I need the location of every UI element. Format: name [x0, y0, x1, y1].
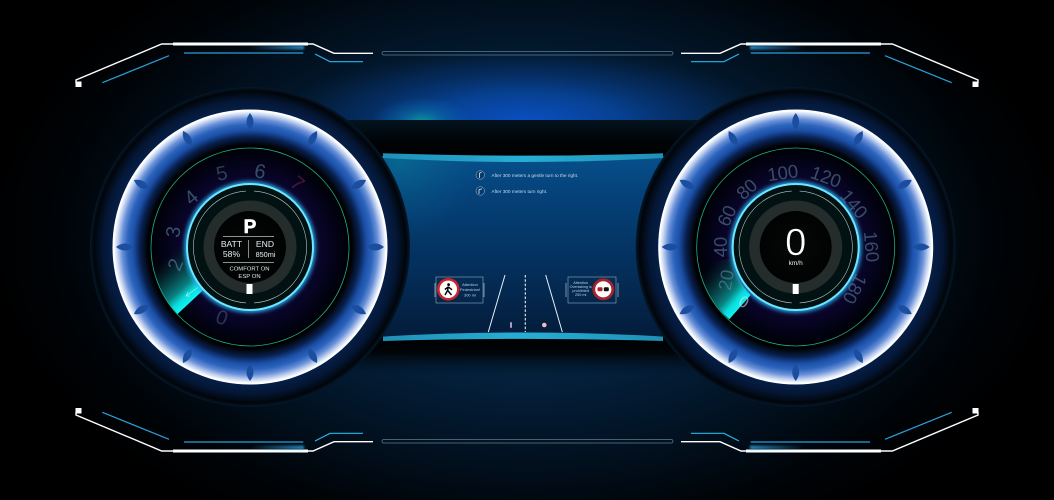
scale ring: [151, 148, 349, 346]
speed scale numbers: 60: [713, 202, 741, 229]
speed scale numbers: 0: [735, 293, 751, 312]
road lane lines: [488, 275, 562, 332]
sign panel: overtaking prohibited: 250 mi: [575, 293, 587, 297]
speed scale numbers: 20: [714, 268, 738, 292]
position marker: [793, 284, 799, 294]
sign panel: pedestrian: Attention: [462, 282, 478, 287]
frame: bottom centre bar: [382, 440, 673, 443]
frame: top centre bar: [382, 52, 673, 55]
sign panel: overtaking prohibited: prohibited: [572, 289, 589, 293]
speed scale numbers: 80: [732, 174, 761, 204]
battery readout: BATT: [221, 239, 243, 249]
icon: road marker person: [510, 322, 512, 328]
position marker: [246, 284, 252, 294]
hub dividers: [223, 237, 274, 263]
top cyan band: [383, 153, 663, 162]
rev scale numbers: 0: [213, 306, 231, 331]
sign panel: overtaking prohibited: Attention: [573, 281, 588, 285]
range readout: END: [256, 239, 274, 249]
speed scale numbers: 120: [808, 162, 844, 192]
icon: pedestrian sign: [438, 279, 458, 299]
frame: bottom right: [681, 408, 978, 451]
navigation instruction 2: After 300 meters turn right.: [492, 189, 547, 194]
needle sweep: [698, 258, 751, 319]
sign panel: pedestrian: 300 mi: [464, 292, 476, 298]
cyan hub ring: [733, 184, 859, 310]
sign panel: overtaking prohibited: Overtaking is: [570, 285, 592, 289]
rev scale numbers: 4: [180, 186, 203, 210]
speed scale numbers: 140: [836, 185, 872, 223]
needle sweep: [151, 247, 203, 314]
gauge bezel ring: [112, 110, 388, 384]
rev scale numbers: 2: [164, 256, 188, 274]
right gauge: [636, 87, 956, 407]
rev scale numbers: 7: [286, 172, 308, 196]
speed scale numbers: 40: [710, 237, 731, 257]
gauge housing: [636, 87, 956, 407]
hub arcs: [739, 191, 852, 303]
rev scale numbers: 3: [162, 225, 186, 239]
navigation instruction 2: [476, 187, 547, 195]
icon: road marker sign: [542, 323, 547, 327]
bezel tick leaves: [662, 113, 930, 381]
hub arcs: [193, 191, 307, 303]
frame: bottom left: [76, 408, 373, 451]
gauge bezel ring: [658, 110, 933, 384]
cyan hub ring: [187, 184, 313, 310]
comfort status: [229, 266, 270, 280]
gear indicator: P: [244, 217, 257, 238]
battery readout: [221, 239, 243, 259]
rev scale numbers: 6: [253, 160, 267, 184]
comfort status: ESP ON: [238, 274, 261, 280]
scale ring: [697, 148, 895, 346]
speed scale numbers: [710, 160, 884, 312]
gauge housing: [90, 87, 410, 407]
sign panel: pedestrian: [435, 277, 484, 303]
speed scale numbers: 180: [838, 270, 872, 308]
speed unit: km/h: [789, 260, 803, 267]
left gauge: [90, 87, 410, 407]
hub discs: [749, 200, 842, 294]
needle arrow: [186, 286, 200, 296]
icon: no overtaking sign: [594, 280, 613, 299]
sign panel: pedestrian: Pedestrian!: [460, 287, 480, 292]
battery readout: 58%: [223, 249, 240, 259]
navigation instruction 1: [476, 171, 578, 179]
frame: top left: [76, 44, 373, 87]
range readout: [256, 239, 276, 259]
rev scale numbers: 5: [214, 162, 230, 186]
bottom cyan band: [383, 332, 663, 341]
comfort status: COMFORT ON: [229, 266, 270, 272]
speed scale numbers: 100: [766, 160, 799, 185]
frame: top right: [681, 44, 978, 87]
hub discs: [204, 200, 296, 294]
sign panel: overtaking prohibited: [566, 277, 618, 303]
bezel tick leaves: [116, 113, 384, 381]
speed readout: 0: [785, 222, 806, 264]
navigation instruction 1: After 300 meters a gentle turn to the right.: [492, 173, 578, 178]
range readout: 850mi: [256, 250, 276, 259]
panel: top glow: [270, 40, 780, 121]
speed scale numbers: 160: [860, 230, 884, 263]
panel: centre windscreen: [340, 120, 710, 378]
rev scale numbers: [162, 160, 308, 331]
